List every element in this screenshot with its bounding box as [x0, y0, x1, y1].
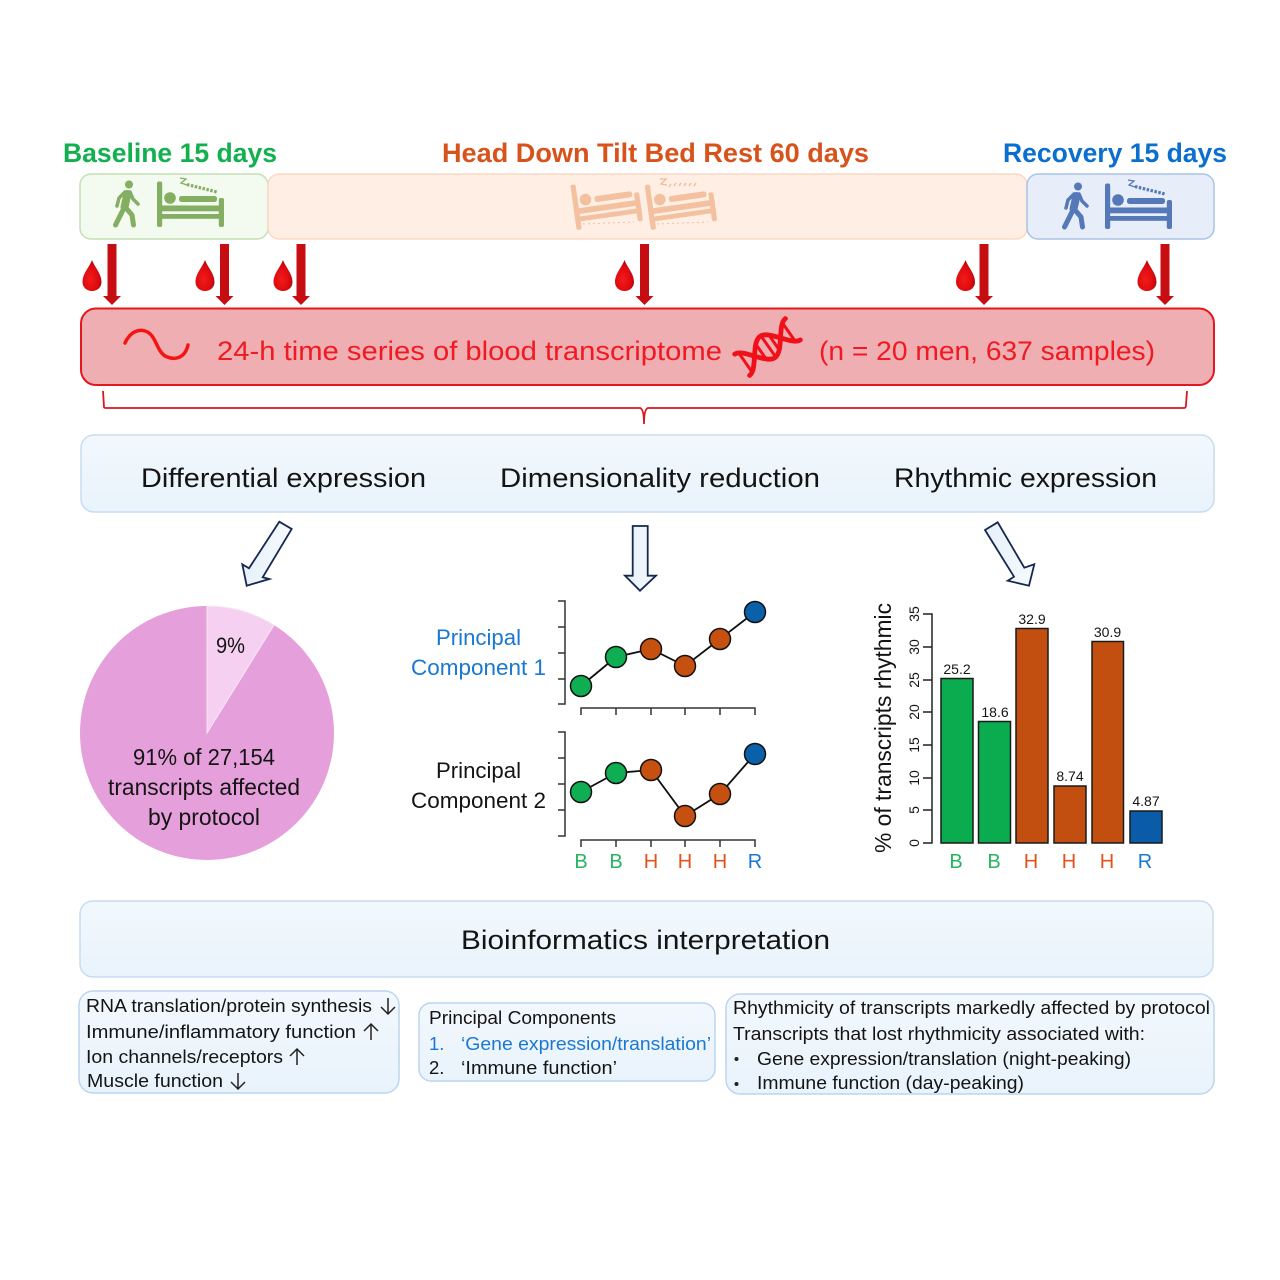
y tick labels: 15 — [906, 737, 922, 753]
panel: rhythmicity results — [726, 994, 1214, 1094]
heading: Head Down Tilt Bed Rest 60 days: Head Down Tilt Bed Rest 60 days — [442, 138, 869, 168]
arrow: to pie — [242, 522, 292, 586]
y tick labels: 10 — [906, 770, 922, 786]
drop 4 — [615, 260, 634, 291]
panel: differential expression results — [79, 991, 399, 1093]
arrow 3 — [292, 244, 310, 305]
icon: DNA helix — [735, 319, 800, 375]
drop 1 — [82, 260, 102, 291]
arrow up 2 — [290, 1049, 304, 1065]
panel: head down tilt phase — [268, 174, 1027, 239]
arrow 6 — [1156, 244, 1174, 305]
x labels: R — [1138, 851, 1152, 873]
panel: 24-h time series — [81, 308, 1214, 385]
text: 91% of 27,154 transcripts affected by protocol: transcripts affected — [108, 774, 300, 800]
text: rhythmic expression: Rhythmic expression — [894, 463, 1157, 493]
bars — [941, 628, 1162, 843]
item 1: ‘Gene expression/translation’ — [461, 1033, 711, 1054]
bar values: 30.9 — [1094, 624, 1121, 640]
icon: bed blue — [1105, 184, 1172, 229]
drop 6 — [1138, 260, 1156, 291]
bullet 2 — [734, 1082, 738, 1086]
label: principal component 2 — [411, 758, 546, 813]
label: principal component 1 — [411, 625, 546, 680]
text: dimensionality reduction: Dimensionality reduction — [500, 463, 820, 493]
line 3: Ion channels/receptors — [86, 1046, 283, 1067]
text: 91% of 27,154 transcripts affected by protocol — [108, 744, 300, 830]
icon: tilted bed 2 — [645, 176, 717, 230]
text: bioinformatics interpretation: Bioinformatics interpretation — [461, 925, 830, 955]
text: 91% of 27,154 transcripts affected by protocol: by protocol — [148, 804, 260, 830]
label: principal component 2: Component 2 — [411, 788, 546, 813]
item 2: ‘Immune function’ — [461, 1057, 617, 1078]
arrow up 1 — [364, 1024, 378, 1040]
icon: floor dotted lines — [583, 222, 708, 224]
panel: bioinformatics interpretation — [80, 901, 1213, 977]
text: time series: 24-h time series of blood transcriptome — [217, 336, 722, 366]
label: principal component 1: Component 1 — [411, 655, 546, 680]
heading: Baseline 15 days: Baseline 15 days — [63, 138, 277, 168]
arrow 4 — [636, 244, 654, 305]
x labels: H — [1100, 851, 1114, 873]
text: 9%: 9% — [216, 633, 245, 658]
line 1: Rhythmicity of transcripts markedly affected by protocol — [733, 997, 1210, 1018]
y tick labels: 30 — [906, 639, 922, 655]
icon: bed green — [157, 182, 224, 227]
y tick labels: 5 — [906, 806, 922, 814]
line 2: Transcripts that lost rhythmicity associated with: — [733, 1023, 1145, 1044]
label: principal component 2: Principal — [436, 758, 521, 783]
y tick labels: 0 — [906, 839, 922, 847]
y tick labels: 35 — [906, 606, 922, 622]
icon: tilt blue — [1128, 180, 1165, 194]
bar values: 25.2 — [943, 661, 971, 677]
icon: zzz tilt — [660, 179, 696, 187]
icon: walking person blue — [1064, 182, 1087, 227]
icon: tilt green — [180, 178, 217, 192]
blood sampling arrows and drops — [82, 244, 1174, 305]
panel: recovery phase — [1027, 174, 1214, 239]
pie slice: 9% — [207, 606, 274, 733]
panel: baseline phase — [80, 174, 268, 239]
bar values: 32.9 — [1018, 611, 1046, 627]
arrow down 2 — [231, 1073, 245, 1089]
y axis title: % of transcripts rhythmic — [870, 603, 896, 853]
chart: rhythmic bars — [870, 603, 1162, 873]
heading: Principal Components — [429, 1007, 616, 1028]
drop 3 — [274, 260, 292, 291]
arrow down 1 — [381, 998, 395, 1014]
icon: sine wave — [125, 330, 188, 358]
x labels: R — [748, 851, 762, 873]
text: 91% of 27,154 transcripts affected by protocol: 91% of 27,154 — [133, 744, 275, 770]
x labels: B — [574, 851, 588, 873]
drop 2 — [196, 260, 214, 291]
x labels: B — [987, 851, 1001, 873]
line 3: Gene expression/translation (night-peaking) — [757, 1048, 1131, 1069]
line 1: RNA translation/protein synthesis — [86, 995, 372, 1016]
x labels: B — [949, 851, 963, 873]
line 4: Immune function (day-peaking) — [757, 1072, 1024, 1093]
arrow: to principal components — [625, 526, 656, 591]
line 4: Muscle function — [87, 1070, 223, 1091]
text: differential expression: Differential expression — [141, 463, 426, 493]
bar values: 4.87 — [1132, 793, 1160, 809]
bullet 1 — [734, 1057, 738, 1061]
text: sample size: (n = 20 men, 637 samples) — [819, 336, 1155, 366]
bar values: 18.6 — [981, 704, 1009, 720]
panel: principal components results — [419, 1003, 715, 1081]
chart: principal component 2 line — [558, 732, 766, 873]
y tick labels: 25 — [906, 672, 922, 688]
x labels: H — [644, 851, 658, 873]
y tick labels — [906, 606, 922, 847]
arrow 2 — [216, 244, 234, 305]
x labels: H — [1062, 851, 1076, 873]
x labels: H — [678, 851, 692, 873]
label: principal component 1: Principal — [436, 625, 521, 650]
x labels — [574, 851, 762, 873]
item 2: 2. — [429, 1057, 444, 1078]
x labels: H — [1024, 851, 1038, 873]
line 2: Immune/inflammatory function — [86, 1021, 356, 1042]
chart: principal component 1 line — [558, 601, 766, 715]
panel: analyses — [81, 435, 1214, 512]
y tick labels: 20 — [906, 704, 922, 720]
bar values: 8.74 — [1056, 768, 1084, 784]
x labels: H — [713, 851, 727, 873]
heading: Recovery 15 days: Recovery 15 days — [1003, 138, 1227, 168]
bar values — [943, 611, 1160, 809]
icon: walking person green — [116, 180, 138, 225]
icon: tilted bed 1 — [570, 176, 643, 230]
arrow: to rhythmic bars — [985, 522, 1034, 586]
x labels — [949, 851, 1152, 873]
arrow 1 — [103, 244, 121, 305]
drop 5 — [956, 260, 975, 291]
pie chart — [80, 606, 334, 860]
x labels: B — [609, 851, 623, 873]
arrow 5 — [975, 244, 993, 305]
item 1: 1. — [429, 1033, 444, 1054]
bracket — [103, 391, 1187, 424]
